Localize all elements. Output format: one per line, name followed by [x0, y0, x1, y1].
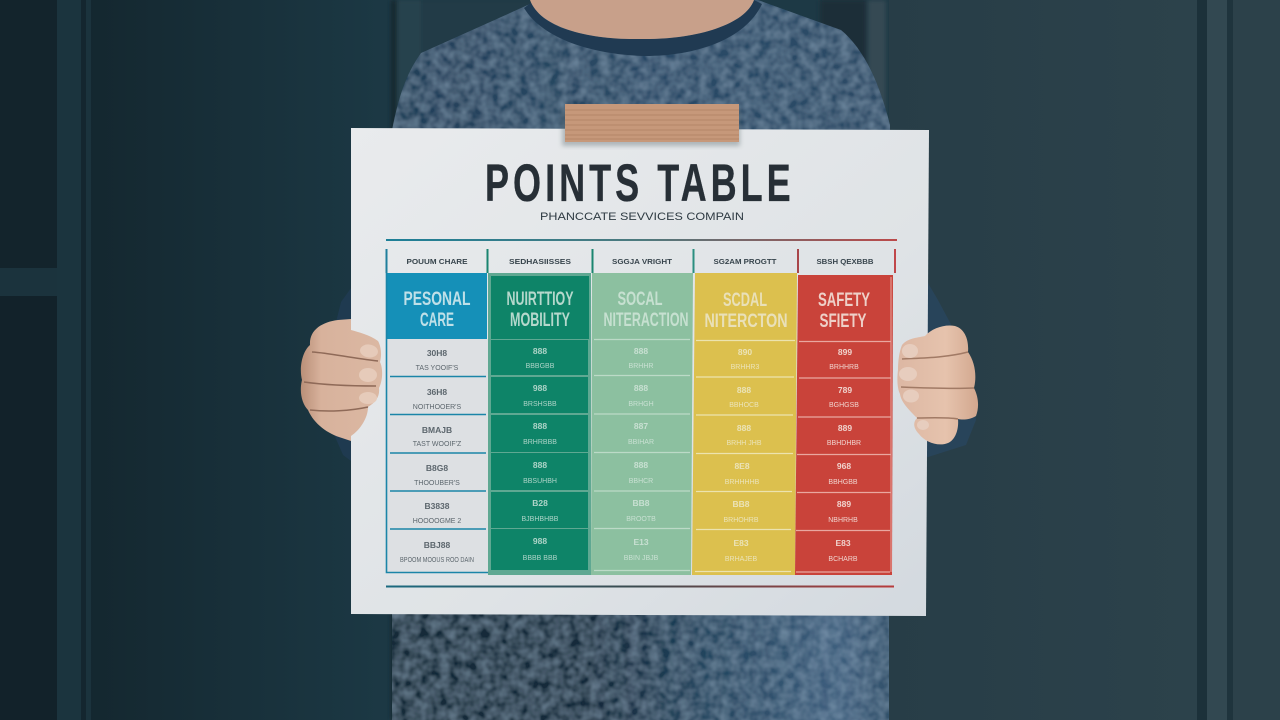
body rows: BRHHHHB [725, 479, 760, 486]
column block [692, 273, 797, 575]
body rows: BB8 [632, 498, 650, 508]
column header dividers [386, 249, 896, 273]
palm and fingers [897, 325, 978, 444]
body rows: B3838 [424, 501, 450, 511]
title: POINTS TABLE [485, 153, 795, 213]
column: social interaction green [591, 257, 693, 575]
body rows: E83 [733, 538, 749, 548]
column block [591, 273, 693, 575]
body rows: 887 [634, 421, 648, 431]
body rows: B28 [532, 498, 548, 508]
body rows: 988 [533, 536, 547, 546]
body rows: BPOOM MOOUS ROO DAIN [400, 557, 474, 564]
body rows: THOOUBER'S [414, 480, 460, 487]
body rows: 890 [738, 347, 752, 357]
column: social interaction yellow [692, 257, 797, 575]
heading text: NITERACTION [604, 310, 688, 331]
heading text: SFIETY [820, 311, 867, 332]
column label: SGGJA VRIGHT [612, 257, 672, 266]
body rows [386, 273, 488, 572]
body rows: TAST WOOIF'Z [413, 441, 462, 448]
body rows: BBHDHBR [827, 440, 861, 447]
body rows: 30H8 [427, 348, 447, 358]
body rows [594, 340, 690, 570]
person: collar [524, 0, 762, 56]
heading block [387, 273, 487, 339]
heading text [704, 290, 788, 332]
person: neck [530, 0, 754, 39]
body rows: BRHAJEB [725, 556, 757, 563]
column block [488, 273, 591, 575]
body rows: B8G8 [426, 463, 448, 473]
body rows: BRHHRB [829, 364, 859, 371]
body rows: BBSUHBH [523, 478, 557, 485]
body rows: BRHH JHB [726, 440, 762, 447]
body rows: BROOTB [626, 516, 656, 523]
body rows: E13 [633, 537, 649, 547]
body rows [796, 277, 891, 572]
heading text [506, 289, 574, 331]
body rows: NBHRHB [828, 517, 858, 524]
body rows: BBJ88 [424, 540, 450, 550]
body rows: 8E8 [734, 461, 750, 471]
right hand [897, 325, 978, 444]
body rows: TAS YOOIF'S [416, 365, 459, 372]
body rows: BRHGH [628, 401, 654, 408]
body rows: BRHHR [629, 363, 653, 370]
body rows: BBHOCB [729, 402, 759, 409]
body rows: E83 [835, 538, 851, 548]
column: nutrition mobility [488, 257, 591, 575]
column: personal care [386, 257, 488, 572]
bottom rule [386, 586, 894, 588]
heading text: MOBILITY [510, 310, 570, 331]
heading block [491, 276, 589, 339]
heading text: SAFETY [818, 290, 870, 311]
body rows: 968 [837, 461, 851, 471]
body rows [695, 340, 795, 572]
column: safety [795, 257, 893, 575]
body rows: 888 [634, 346, 648, 356]
body rows: BBBGBB [526, 363, 555, 370]
left hand [301, 319, 382, 441]
person: sweater upper [392, 0, 890, 200]
body rows: BBIN JBJB [624, 555, 659, 562]
heading text [404, 289, 471, 331]
body rows: BRHRBBB [523, 439, 557, 446]
body rows: 888 [634, 460, 648, 470]
heading text: NITERCTON [704, 311, 788, 332]
finger creases [304, 352, 378, 411]
body rows: BB8 [732, 499, 750, 509]
fingernails [359, 343, 379, 404]
body rows: 889 [837, 499, 851, 509]
body rows: 888 [533, 421, 547, 431]
finger creases [901, 352, 974, 419]
column label: SEDHASIISSES [509, 257, 571, 266]
column label: SBSH QEXBBB [816, 257, 874, 266]
body rows: 899 [838, 347, 852, 357]
body rows: HOOOOGME 2 [413, 518, 461, 525]
body rows: BBHGBB [828, 479, 858, 486]
fingernails [899, 344, 929, 430]
column label: POUUM CHARE [406, 257, 468, 266]
heading text [604, 289, 688, 331]
body rows: BBHCR [629, 478, 653, 485]
palm and fingers [301, 319, 382, 441]
body rows: NOITHOOER'S [413, 404, 462, 411]
body rows: 888 [533, 346, 547, 356]
body rows: BGHGSB [829, 402, 859, 409]
body rows: 888 [533, 460, 547, 470]
heading text: CARE [420, 310, 454, 331]
body rows: BMAJB [422, 425, 452, 435]
body rows: 988 [533, 383, 547, 393]
heading text: SOCAL [618, 289, 663, 310]
body rows: BRSHSBB [523, 401, 557, 408]
body rows: BBIHAR [628, 439, 654, 446]
body rows: BBBB BBB [523, 555, 558, 562]
body rows: BCHARB [828, 556, 858, 563]
body rows: BRHOHRB [723, 517, 759, 524]
top rule [386, 239, 897, 241]
body rows: 888 [737, 385, 751, 395]
heading text [818, 290, 870, 332]
body rows: 789 [838, 385, 852, 395]
body rows: BJBHBHBB [522, 516, 559, 523]
body rows: 888 [737, 423, 751, 433]
body rows: 888 [634, 383, 648, 393]
heading text: SCDAL [723, 290, 767, 311]
subtitle: PHANCCATE SEVVICES COMPAIN [540, 211, 744, 223]
wooden clip [562, 104, 740, 146]
paper sheet [351, 128, 929, 616]
heading text: NUIRTTIOY [506, 289, 574, 310]
body rows: 889 [838, 423, 852, 433]
column label: SG2AM PROGTT [714, 257, 777, 266]
body rows: 36H8 [427, 387, 447, 397]
body rows: BRHHR3 [731, 364, 759, 371]
person: sleeves [333, 278, 976, 461]
heading text: PESONAL [404, 289, 471, 310]
body rows [491, 340, 588, 570]
column block [795, 275, 893, 575]
person: sweater lower [392, 600, 889, 720]
